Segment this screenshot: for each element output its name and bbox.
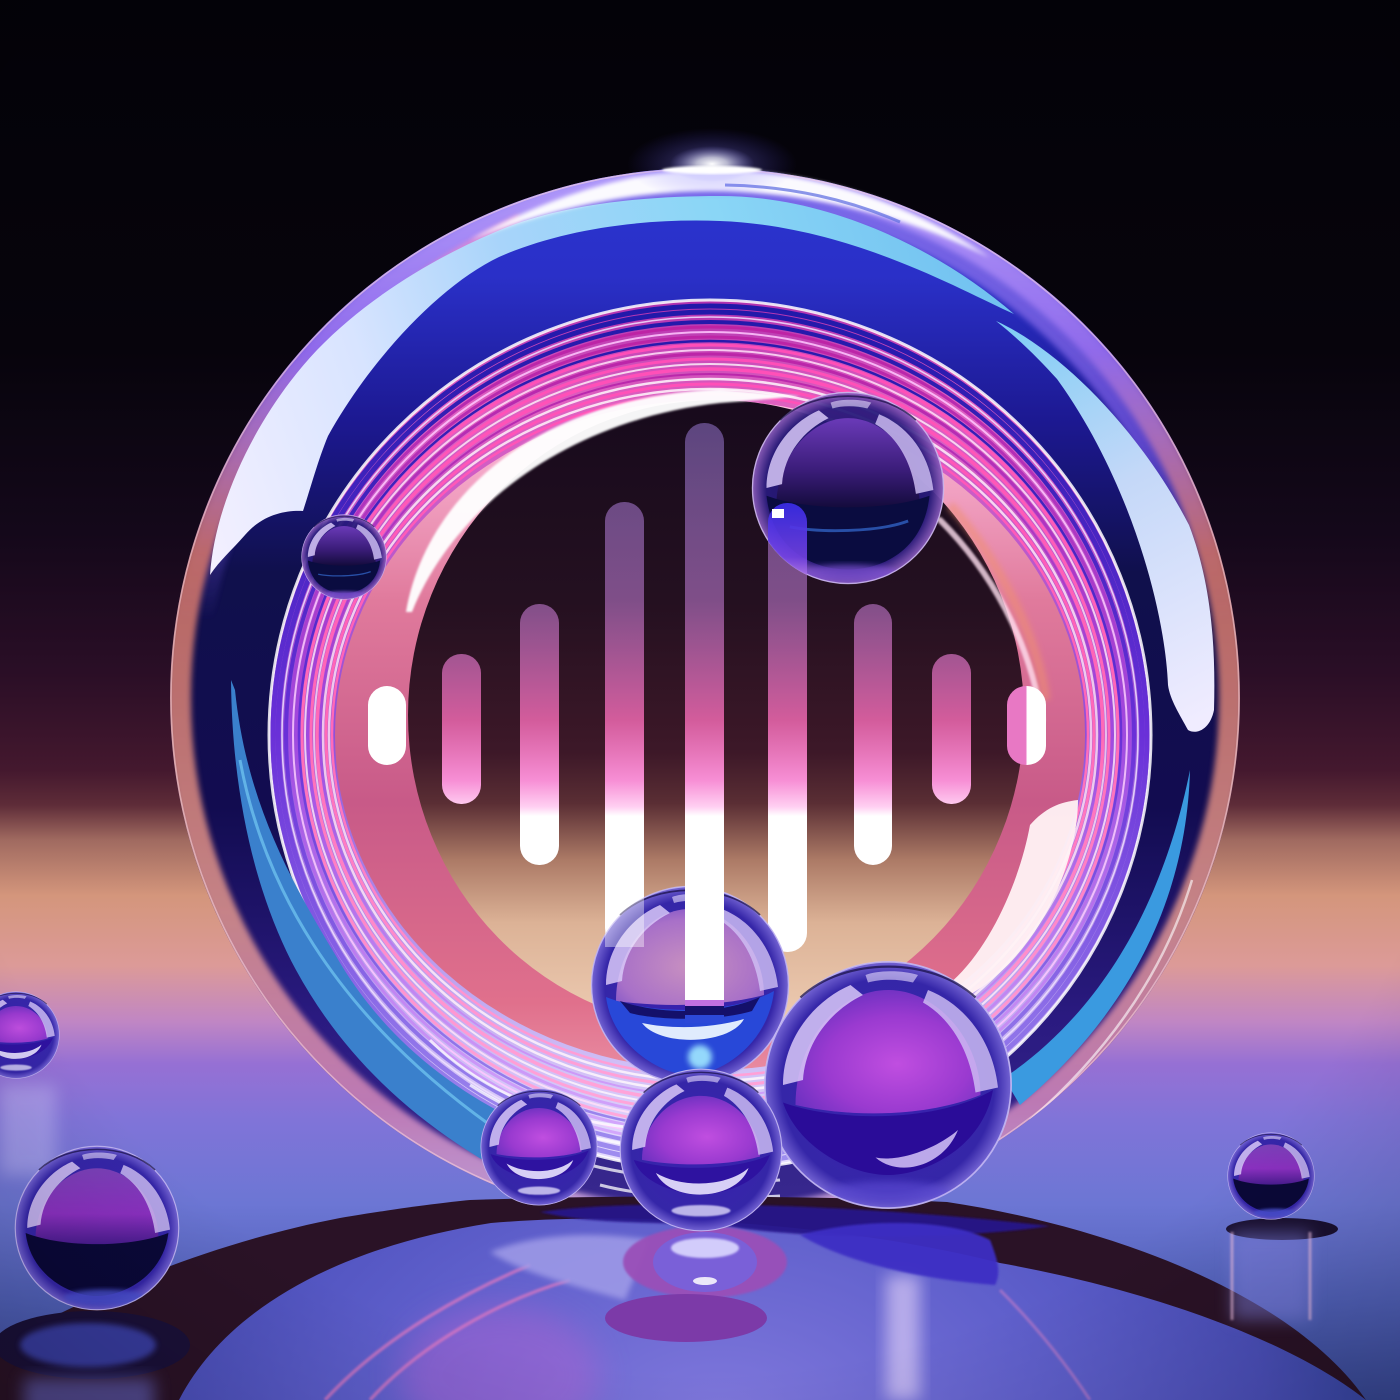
dark blue shadow under spheres [540, 1204, 1050, 1236]
sphere: bottom right largest [764, 961, 1012, 1209]
pink glow [400, 1305, 600, 1400]
sphere: left edge [0, 991, 60, 1079]
ring body: outer blue band [170, 168, 1240, 1228]
sphere: bottom small centre [620, 1069, 782, 1231]
thin blue line in top rim [725, 185, 900, 222]
left floor sphere reflection [0, 1311, 190, 1379]
left edge sphere reflection [0, 1085, 56, 1175]
left lavender reflection [490, 1235, 650, 1300]
pink streak on upper left rim [410, 214, 521, 276]
orange glow on right tube [950, 505, 1046, 700]
dark disc edge [0, 1196, 1366, 1400]
sphere: floor left [15, 1146, 179, 1310]
pink streaks [325, 1265, 570, 1400]
vertical light stripe [886, 1275, 920, 1400]
white highlight along hole top [406, 389, 800, 612]
sphere: bottom left of ring [481, 1089, 597, 1205]
right highlight streak [940, 520, 1042, 720]
lower right white window on inner tube [948, 800, 1078, 1000]
top lens flare [627, 128, 797, 200]
lower right blue band [1004, 770, 1190, 1105]
table surface disc [0, 1085, 1366, 1400]
right pink streak [1000, 1290, 1090, 1400]
centre sphere reflection [623, 1226, 787, 1298]
translucent lavender outer zone [199, 170, 1211, 606]
centre bar over sphere [685, 884, 724, 1023]
right blue reflection [800, 1223, 998, 1285]
pink glass rim glow [179, 176, 1231, 1220]
lit disc surface [179, 1218, 1366, 1400]
sphere: bottom centre large [591, 886, 789, 1084]
top white rim band [470, 170, 990, 258]
sphere: small ring left [301, 514, 387, 600]
highlight: left crescent and top cyan reflection [210, 196, 1014, 575]
lower lavender horizontal streaks [430, 1040, 780, 1198]
fine streak arcs [269, 300, 1151, 1170]
highlight: right crescent [996, 321, 1214, 732]
right floor sphere shadow and reflection [1226, 1218, 1338, 1240]
pink inner tube [335, 400, 1085, 1070]
audio waveform bars [368, 423, 1046, 1023]
bar refracted through top right sphere [768, 503, 807, 575]
lower sphere reflection [605, 1294, 767, 1342]
sphere: large top right [752, 392, 944, 584]
streak band base [269, 300, 1151, 1170]
hole in ring [408, 400, 1024, 1030]
left bar seen through sphere [605, 896, 644, 947]
ring outer rim line [171, 169, 1239, 1227]
glass ring [170, 168, 1240, 1228]
lower left blue band [231, 680, 512, 1170]
sphere: floor right [1227, 1132, 1315, 1220]
